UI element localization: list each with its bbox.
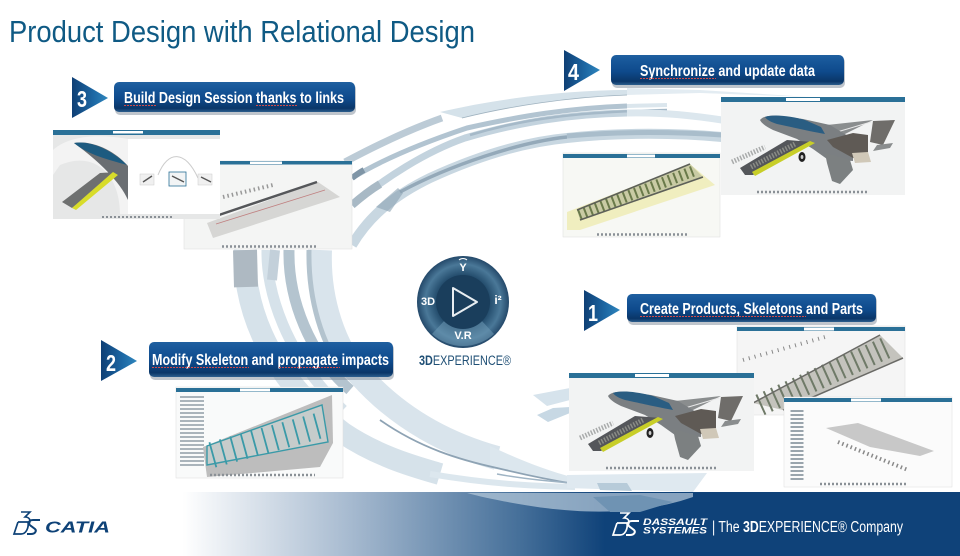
central 3DEXPERIENCE compass logo (417, 256, 511, 368)
button: step 2 label: Modify Skeleton and propagate impacts (152, 352, 389, 369)
arrow: step 4 (564, 50, 600, 91)
footer band (0, 492, 960, 556)
CATIA logo (14, 512, 110, 536)
central 3DEXPERIENCE compass logo: V.R (454, 330, 472, 342)
step 1: create products (569, 290, 952, 487)
step 3: build design session (53, 77, 356, 249)
button: step 4 label (611, 55, 845, 88)
screenshot: wing ribs (563, 153, 720, 237)
arrow: step 1: 1 (588, 300, 598, 326)
arrow: step 2: 2 (106, 350, 116, 376)
button: step 3 label: Build Design Session thanks to links (124, 90, 344, 107)
arrow: step 3: 3 (77, 86, 87, 112)
step 2: modify skeleton (101, 340, 394, 478)
step 4: synchronize (563, 50, 905, 237)
button: step 3 label (114, 82, 356, 115)
Dassault Systemes logo and tagline: | The 3DEXPERIENCE® Company (712, 519, 903, 536)
central 3DEXPERIENCE compass logo: i² (494, 293, 502, 307)
screenshot: wing skeleton (737, 326, 905, 415)
decorative swoosh rings (245, 88, 810, 512)
Dassault Systemes logo and tagline: DASSAULT (643, 517, 708, 528)
arrow: step 2 (101, 340, 137, 381)
button: step 4 label: Synchronize and update data (640, 63, 815, 80)
Dassault Systemes logo and tagline (613, 513, 903, 536)
central 3DEXPERIENCE compass logo: Y (459, 262, 467, 274)
central 3DEXPERIENCE compass logo: 3DEXPERIENCE® (419, 353, 511, 368)
screenshot: wing assembly (184, 161, 352, 249)
button: step 1 label: Create Products, Skeletons and Parts (640, 301, 863, 318)
button: step 1 label (627, 294, 877, 325)
screenshot: 3D model with links graph (53, 130, 220, 219)
CATIA logo: CATIA (45, 520, 110, 536)
arrow: step 3 (72, 77, 108, 118)
arrow: step 4: 4 (568, 59, 579, 85)
screenshot: part tree view (784, 397, 952, 487)
screenshot: aircraft with yellow flap (569, 373, 754, 471)
Dassault Systemes logo and tagline: SYSTEMES (643, 526, 708, 536)
screenshot: full aircraft (721, 97, 905, 195)
screenshot: wing edit with tree (176, 387, 343, 478)
button: step 2 label (149, 342, 394, 380)
title: Product Design with Relational Design (9, 14, 475, 49)
arrow: step 1 (584, 290, 620, 331)
central 3DEXPERIENCE compass logo: 3D (421, 296, 435, 308)
